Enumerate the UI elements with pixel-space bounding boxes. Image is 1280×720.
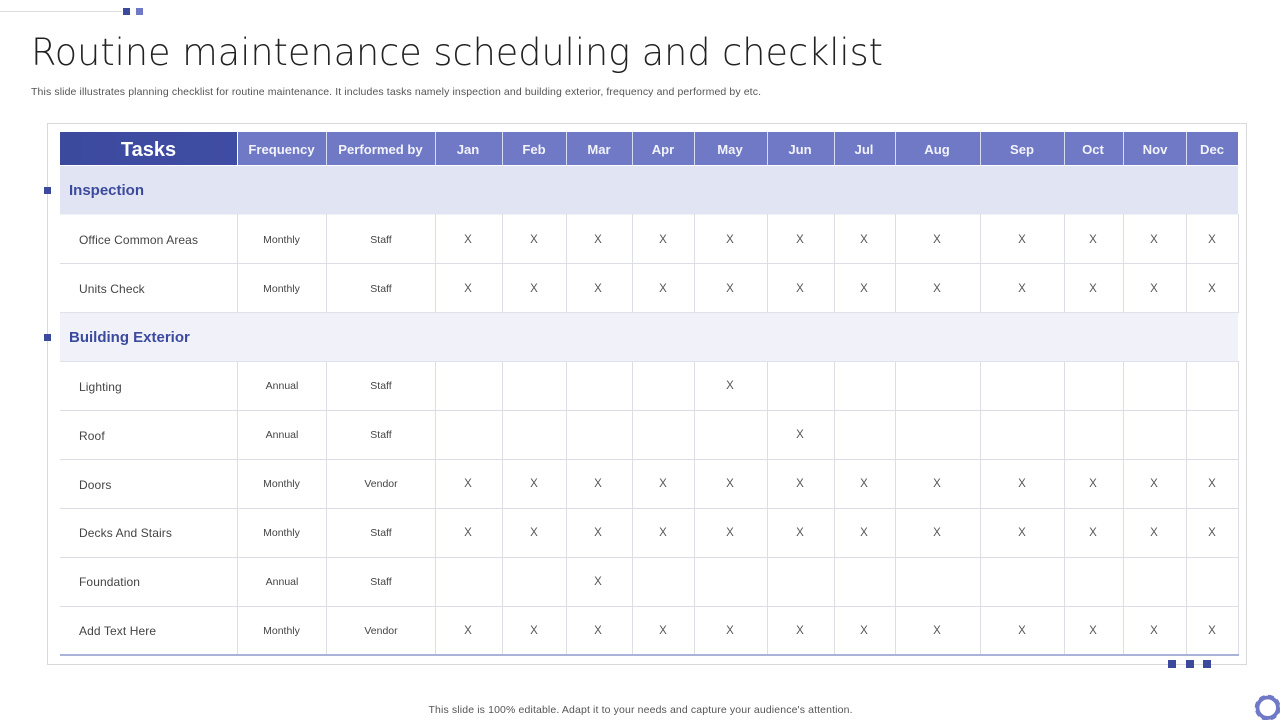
row: Decks And Stairs: X bbox=[933, 527, 941, 539]
row: Foundation: Staff bbox=[370, 576, 392, 588]
row: Decks And Stairs: X bbox=[659, 527, 667, 539]
table header row: Jul bbox=[855, 142, 873, 157]
row: Decks And Stairs: X bbox=[464, 527, 472, 539]
table header row: Apr bbox=[652, 142, 674, 157]
row: Add Text Here: X bbox=[796, 625, 804, 637]
row: Doors: X bbox=[1018, 478, 1026, 490]
row: Decks And Stairs: X bbox=[530, 527, 538, 539]
row: Office Common Areas: X bbox=[1150, 234, 1158, 246]
row: Add Text Here bbox=[79, 624, 1216, 638]
icon: header accent squares bbox=[123, 8, 143, 15]
row: Units Check: X bbox=[1018, 283, 1026, 295]
row: Doors: Vendor bbox=[364, 478, 398, 490]
table header row: Aug bbox=[924, 142, 950, 157]
section: Inspection bbox=[44, 166, 1238, 214]
row: Doors bbox=[79, 478, 1216, 492]
row: Office Common Areas bbox=[79, 233, 1216, 247]
row: Add Text Here: X bbox=[659, 625, 667, 637]
row: Units Check: X bbox=[464, 283, 472, 295]
table header row: May bbox=[717, 142, 743, 157]
row: Doors: X bbox=[464, 478, 472, 490]
row: Add Text Here: Monthly bbox=[263, 625, 301, 637]
row: Doors: X bbox=[1208, 478, 1216, 490]
row: Office Common Areas: Office Common Areas bbox=[79, 233, 198, 247]
row: Office Common Areas: X bbox=[860, 234, 868, 246]
row: Add Text Here: X bbox=[933, 625, 941, 637]
row: Decks And Stairs: X bbox=[1018, 527, 1026, 539]
row: Foundation: Annual bbox=[266, 576, 298, 588]
row: Foundation: X bbox=[594, 576, 602, 588]
row: Foundation bbox=[79, 575, 602, 589]
row: Decks And Stairs: X bbox=[1089, 527, 1097, 539]
row: Roof: X bbox=[796, 429, 804, 441]
row: Doors: X bbox=[860, 478, 868, 490]
row: Decks And Stairs: X bbox=[1150, 527, 1158, 539]
row: Doors: X bbox=[594, 478, 602, 490]
row: Add Text Here: Add Text Here bbox=[79, 624, 156, 638]
table header row: Feb bbox=[522, 142, 546, 157]
row: Doors: Doors bbox=[79, 478, 112, 492]
row: Roof bbox=[79, 429, 804, 443]
row: Lighting: Staff bbox=[370, 380, 392, 392]
row: Units Check: X bbox=[594, 283, 602, 295]
panel: checklist table bbox=[44, 124, 1246, 664]
table header row: Tasks bbox=[121, 139, 176, 161]
row: Units Check: X bbox=[933, 283, 941, 295]
row: Units Check bbox=[79, 282, 1216, 296]
row: Doors: X bbox=[933, 478, 941, 490]
row: Units Check: X bbox=[796, 283, 804, 295]
table header row: Nov bbox=[1143, 142, 1168, 157]
row: Office Common Areas: X bbox=[464, 234, 472, 246]
panel frame bbox=[48, 124, 1246, 664]
title: Routine maintenance scheduling and checklist bbox=[31, 31, 883, 74]
table header row: Dec bbox=[1200, 142, 1224, 157]
row: Lighting: Lighting bbox=[79, 380, 122, 394]
row: Lighting bbox=[79, 380, 734, 394]
icon: gear bbox=[1256, 696, 1280, 720]
row: Units Check: X bbox=[659, 283, 667, 295]
subtitle text: This slide illustrates planning checklist for routine maintenance. It includes tasks namely inspection and building exterior, frequency and performed by etc. bbox=[31, 86, 761, 98]
row: Roof: Roof bbox=[79, 429, 105, 443]
row: Office Common Areas: Monthly bbox=[263, 234, 301, 246]
row: Decks And Stairs: X bbox=[726, 527, 734, 539]
row: Doors: X bbox=[1089, 478, 1097, 490]
row: Office Common Areas: X bbox=[594, 234, 602, 246]
table header row: Jan bbox=[457, 142, 479, 157]
row: Doors: X bbox=[796, 478, 804, 490]
row: Office Common Areas: X bbox=[659, 234, 667, 246]
row: Doors: X bbox=[1150, 478, 1158, 490]
footer note: This slide is 100% editable. Adapt it to your needs and capture your audience's attention. bbox=[428, 704, 852, 716]
row: Units Check: Staff bbox=[370, 283, 392, 295]
table header row: Performed by bbox=[338, 142, 423, 157]
section: Building Exterior bbox=[44, 312, 1238, 362]
row: Add Text Here: Vendor bbox=[364, 625, 398, 637]
row: Add Text Here: X bbox=[594, 625, 602, 637]
row: Decks And Stairs bbox=[79, 526, 1216, 540]
row: Doors: X bbox=[726, 478, 734, 490]
table header row: Oct bbox=[1082, 142, 1105, 157]
row: Add Text Here: X bbox=[860, 625, 868, 637]
row: Add Text Here: X bbox=[726, 625, 734, 637]
row: Units Check: X bbox=[1150, 283, 1158, 295]
row: Lighting: X bbox=[726, 380, 734, 392]
row: Office Common Areas: Staff bbox=[370, 234, 392, 246]
row: Doors: X bbox=[530, 478, 538, 490]
section: Building Exterior: Building Exterior bbox=[69, 329, 190, 346]
table header row: Mar bbox=[587, 142, 611, 157]
row: Add Text Here: X bbox=[1208, 625, 1216, 637]
row: Decks And Stairs: Monthly bbox=[263, 527, 301, 539]
row: Decks And Stairs: X bbox=[1208, 527, 1216, 539]
row: Office Common Areas: X bbox=[1208, 234, 1216, 246]
row: Units Check: Monthly bbox=[263, 283, 301, 295]
row: Office Common Areas: X bbox=[1018, 234, 1026, 246]
row: Doors: Monthly bbox=[263, 478, 301, 490]
row: Roof: Staff bbox=[370, 429, 392, 441]
icon: footer accent squares bbox=[1168, 660, 1211, 668]
row: Decks And Stairs: Staff bbox=[370, 527, 392, 539]
row: Decks And Stairs: X bbox=[860, 527, 868, 539]
row: Office Common Areas: X bbox=[1089, 234, 1097, 246]
row: Units Check: X bbox=[530, 283, 538, 295]
row: Doors: X bbox=[659, 478, 667, 490]
section: Inspection: Inspection bbox=[69, 182, 144, 199]
table header row: Frequency bbox=[248, 142, 315, 157]
row: Units Check: X bbox=[860, 283, 868, 295]
row: Units Check: X bbox=[1089, 283, 1097, 295]
row: Units Check: X bbox=[726, 283, 734, 295]
row: Add Text Here: X bbox=[530, 625, 538, 637]
table header row: Jun bbox=[788, 142, 812, 157]
row: Add Text Here: X bbox=[1018, 625, 1026, 637]
table header row: Sep bbox=[1010, 142, 1034, 157]
row: Units Check: Units Check bbox=[79, 282, 146, 296]
row: Decks And Stairs: X bbox=[594, 527, 602, 539]
row: Office Common Areas: X bbox=[530, 234, 538, 246]
row: Add Text Here: X bbox=[1150, 625, 1158, 637]
row: Office Common Areas: X bbox=[796, 234, 804, 246]
row: Lighting: Annual bbox=[266, 380, 298, 392]
row: Add Text Here: X bbox=[1089, 625, 1097, 637]
row: Decks And Stairs: X bbox=[796, 527, 804, 539]
row: Office Common Areas: X bbox=[933, 234, 941, 246]
table header row bbox=[60, 132, 1238, 165]
row: Add Text Here: X bbox=[464, 625, 472, 637]
row: Roof: Annual bbox=[266, 429, 298, 441]
row: Office Common Areas: X bbox=[726, 234, 734, 246]
row: Units Check: X bbox=[1208, 283, 1216, 295]
row: Decks And Stairs: Decks And Stairs bbox=[79, 526, 172, 540]
row: Foundation: Foundation bbox=[79, 575, 140, 589]
